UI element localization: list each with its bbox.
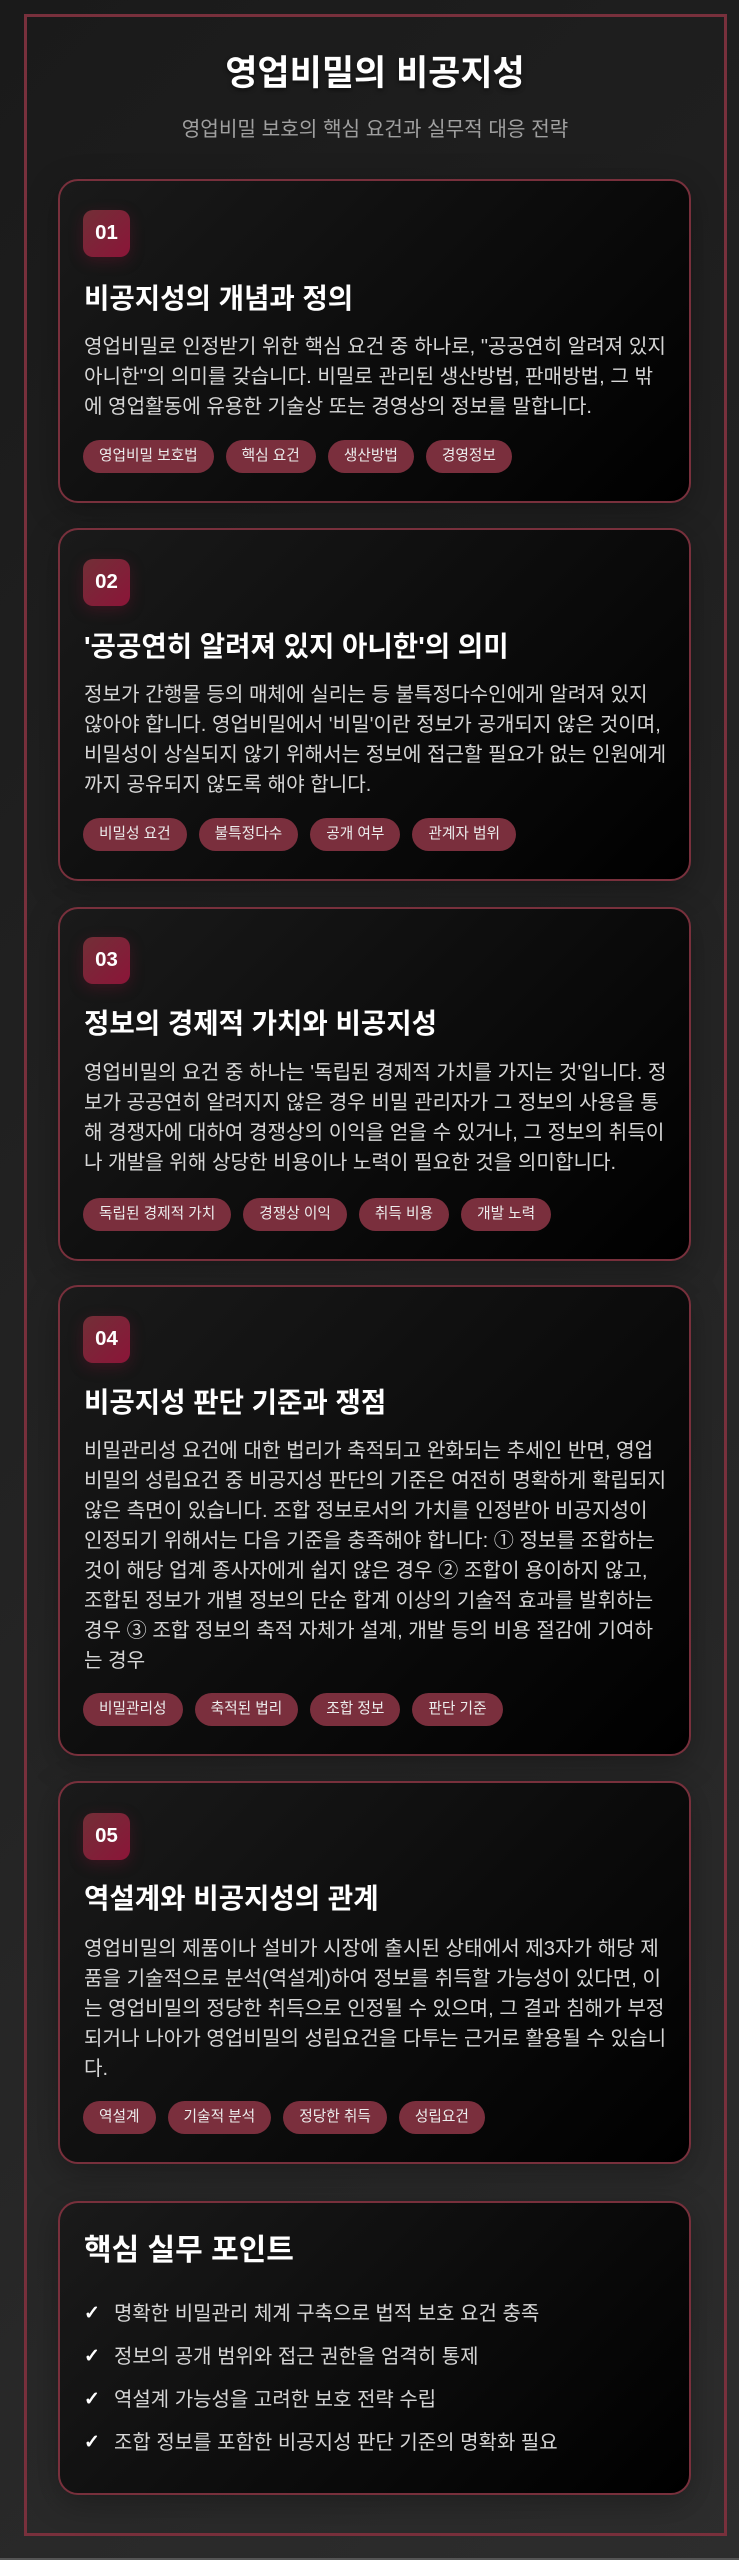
text 04: 조합된 정보가 개별 정보의 단순 합계 이상의 기술적 효과를 발휘하는 [84,1590,653,1612]
text 04: 는 경우 [84,1650,145,1672]
panel: section 03 [58,907,691,1261]
tags 01: 핵심 요건 [242,448,300,464]
tags 03: 경쟁상 이익 [259,1206,331,1222]
panel: section 01 [58,179,691,503]
badge 02: 02 [95,571,118,593]
text 02 [84,684,666,796]
heading 02: '공공연히 알려져 있지 아니한'의 의미 [84,631,509,662]
text 02: 정보가 간행물 등의 매체에 실리는 등 불특정다수인에게 알려져 있지 [84,684,648,706]
tags 03: 개발 노력 [477,1206,535,1222]
text 05: 되거나 나아가 영업비밀의 성립요건을 다투는 근거로 활용될 수 있습니 [84,2028,666,2050]
heading 03: 정보의 경제적 가치와 비공지성 [84,1008,437,1039]
panel: key practical points [58,2201,691,2495]
tags 02: 공개 여부 [326,826,384,842]
panel: section 05 [58,1781,691,2164]
panel: section 04 [58,1285,691,1756]
text 04: 비밀관리성 요건에 대한 법리가 축적되고 완화되는 추세인 반면, 영업 [84,1440,653,1462]
tags 01: 영업비밀 보호법 [99,448,198,464]
tags 01: 생산방법 [344,448,398,464]
tags 05: 기술적 분석 [184,2109,255,2125]
text 02: 비밀성이 상실되지 않기 위해서는 정보에 접근할 필요가 없는 인원에게 [84,744,666,766]
tags 02: 관계자 범위 [428,826,500,842]
text 01: 영업비밀로 인정받기 위한 핵심 요건 중 하나로, "공공연히 알려져 있지 [84,336,666,358]
heading 05: 역설계와 비공지성의 관계 [84,1883,379,1914]
text 03: 해 경쟁자에 대하여 경쟁상의 이익을 얻을 수 있거나, 그 정보의 취득이 [84,1122,664,1144]
heading 01: 비공지성의 개념과 정의 [84,283,353,314]
text 05: 영업비밀의 제품이나 설비가 시장에 출시된 상태에서 제3자가 해당 제 [84,1938,659,1960]
point 2: 정보의 공개 범위와 접근 권한을 엄격히 통제 [114,2346,479,2368]
badge 03 [83,937,130,984]
tags 03: 취득 비용 [375,1206,433,1222]
heading 04: 비공지성 판단 기준과 쟁점 [84,1387,386,1418]
text 01 [84,336,666,418]
text 04: 비밀의 성립요건 중 비공지성 판단의 기준은 여전히 명확하게 확립되지 [84,1470,666,1492]
text 03: 보가 공공연히 알려지지 않은 경우 비밀 관리자가 그 정보의 사용을 통 [84,1092,659,1114]
text 04: 인정되기 위해서는 다음 기준을 충족해야 합니다: ① 정보를 조합하는 [84,1530,655,1552]
text 01: 아니한"의 의미를 갖습니다. 비밀로 관리된 생산방법, 판매방법, 그 밖 [84,366,653,388]
point 3: ✓ [84,2388,100,2410]
badge 01: 01 [95,222,118,244]
badge 05: 05 [95,1825,118,1847]
point 4: 조합 정보를 포함한 비공지성 판단 기준의 명확화 필요 [114,2432,558,2454]
point 3: 역설계 가능성을 고려한 보호 전략 수립 [114,2389,436,2411]
badge 05 [83,1813,130,1860]
text 02: 까지 공유되지 않도록 해야 합니다. [84,774,371,796]
subtitle: 영업비밀 보호의 핵심 요건과 실무적 대응 전략 [182,119,568,141]
tags 04: 판단 기준 [428,1701,487,1717]
tags 01 [83,440,512,473]
tags 05: 역설계 [99,2109,140,2125]
text 04: 경우 ③ 조합 정보의 축적 자체가 설계, 개발 등의 비용 절감에 기여하 [84,1620,653,1642]
tags 02: 비밀성 요건 [99,826,171,842]
tags 02: 불특정다수 [215,826,282,842]
text 03: 영업비밀의 요건 중 하나는 '독립된 경제적 가치를 가지는 것'입니다. 정 [84,1062,666,1084]
text 05: 는 영업비밀의 정당한 취득으로 인정될 수 있으며, 그 결과 침해가 부정 [84,1998,664,2020]
heading: key points: 핵심 실무 포인트 [84,2234,294,2267]
tags 03 [83,1198,551,1231]
tags 05: 성립요건 [415,2109,469,2125]
tags 04: 축적된 법리 [211,1701,282,1717]
point 2: ✓ [84,2345,100,2367]
text 04 [84,1440,666,1672]
text 05: 품을 기술적으로 분석(역설계)하여 정보를 취득할 가능성이 있다면, 이 [84,1968,661,1990]
point 1: 명확한 비밀관리 체계 구축으로 법적 보호 요건 충족 [114,2303,539,2325]
badge 01 [83,210,130,257]
badge 03: 03 [95,949,118,971]
text 03: 나 개발을 위해 상당한 비용이나 노력이 필요한 것을 의미합니다. [84,1152,616,1174]
text 01: 에 영업활동에 유용한 기술상 또는 경영상의 정보를 말합니다. [84,396,592,418]
tags 05 [83,2101,485,2134]
badge 04 [83,1316,130,1363]
panel: section 02 [58,528,691,881]
tags 03: 독립된 경제적 가치 [99,1206,215,1222]
tags 04: 비밀관리성 [99,1701,167,1717]
point 4: ✓ [84,2431,100,2453]
badge 04: 04 [95,1328,118,1350]
text 04: 않은 측면이 있습니다. 조합 정보로서의 가치를 인정받아 비공지성이 [84,1500,648,1522]
tags 02 [83,818,516,851]
tags 04: 조합 정보 [326,1701,384,1717]
point 1: ✓ [84,2302,100,2324]
badge 02 [83,559,130,606]
tags 04 [83,1693,503,1726]
text 05 [84,1938,666,2080]
text 02: 않아야 합니다. 영업비밀에서 '비밀'이란 정보가 공개되지 않은 것이며, [84,714,661,736]
text 05: 다. [84,2058,108,2080]
tags 01: 경영정보 [442,448,496,464]
text 03 [84,1062,666,1174]
text 04: 것이 해당 업계 종사자에게 쉽지 않은 경우 ② 조합이 용이하지 않고, [84,1560,647,1582]
title: 영업비밀의 비공지성 [225,54,525,93]
tags 05: 정당한 취득 [299,2109,371,2125]
